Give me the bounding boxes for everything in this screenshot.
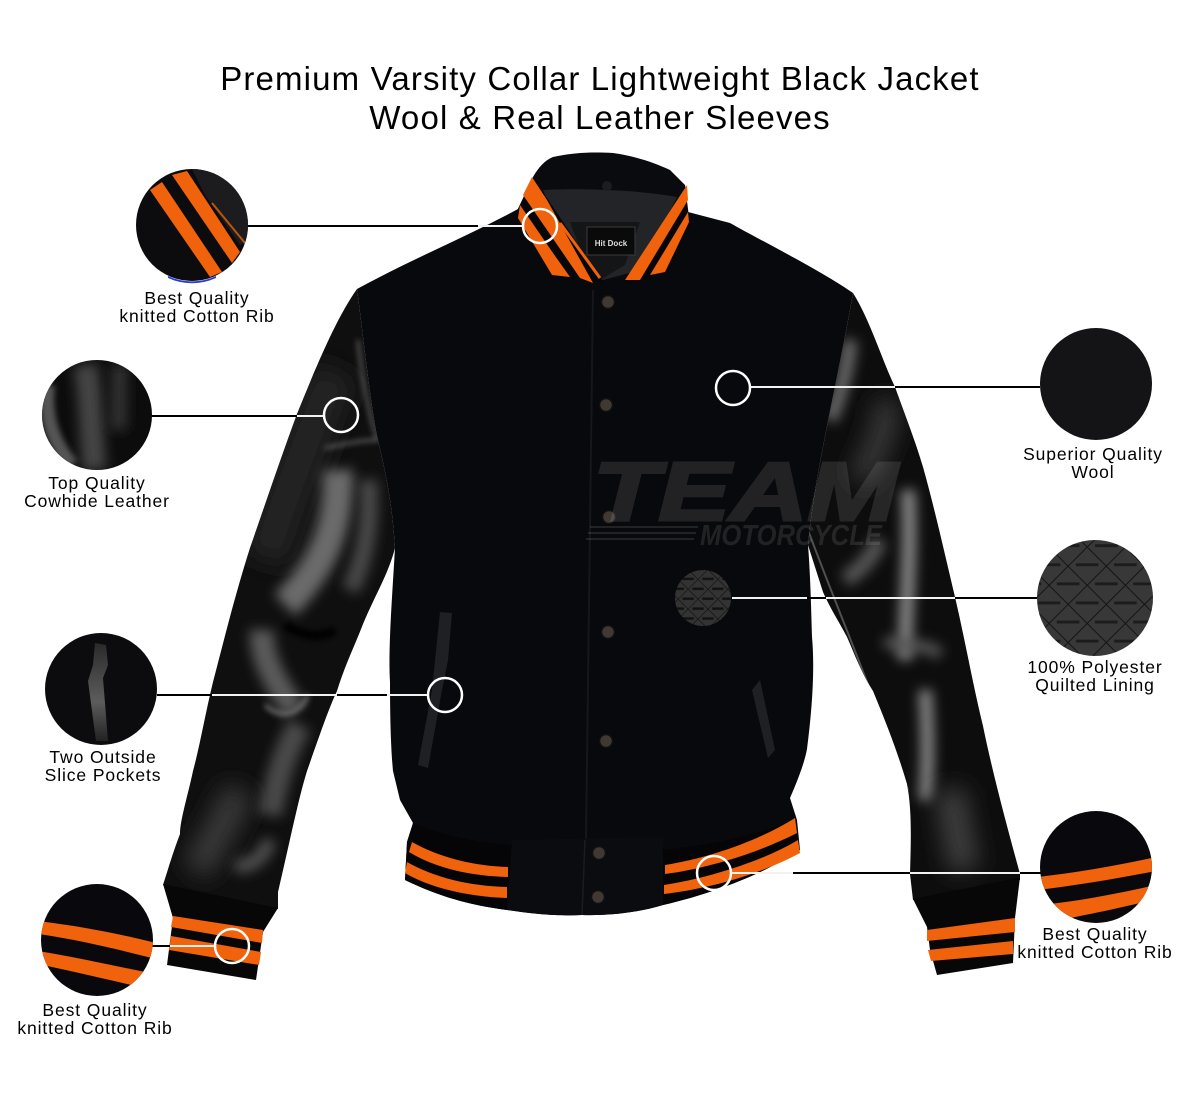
- watermark: TEAM: [593, 445, 899, 538]
- right leather sleeve: [808, 293, 1020, 900]
- quilted lining patch: [675, 570, 731, 626]
- placket seams and snaps: [586, 290, 616, 840]
- title: Wool & Real Leather Sleeves: [369, 99, 831, 136]
- title: Premium Varsity Collar Lightweight Black Jacket: [220, 60, 980, 97]
- collar back: [533, 152, 688, 278]
- callout: hem rib: [1017, 811, 1173, 962]
- callout: hem rib: knitted Cotton Rib: [1017, 942, 1173, 962]
- title: [220, 60, 980, 136]
- collar knit bands: [515, 177, 690, 284]
- slice pockets: [418, 612, 775, 768]
- callout: wool: [1023, 328, 1163, 482]
- callout: cuff rib: Best Quality: [42, 1000, 148, 1020]
- callout: hem rib: Best Quality: [1042, 924, 1148, 944]
- callout: wool: Wool: [1071, 462, 1115, 482]
- callout: quilted lining: 100% Polyester: [1027, 657, 1163, 677]
- callout: cuff rib: knitted Cotton Rib: [17, 1018, 173, 1038]
- jacket: [163, 152, 1020, 980]
- callout: cotton rib collar: [119, 165, 275, 326]
- callout: cuff rib: [17, 884, 173, 1038]
- right cuff: [913, 877, 1020, 975]
- hem rib: [405, 818, 800, 915]
- watermark: MOTORCYCLE: [700, 520, 883, 552]
- callout: wool: Superior Quality: [1023, 444, 1163, 464]
- callout: cowhide leather: [24, 360, 170, 511]
- callout: cotton rib collar: knitted Cotton Rib: [119, 306, 275, 326]
- callout: cowhide leather: Cowhide Leather: [24, 491, 170, 511]
- callout: cowhide leather: Top Quality: [48, 473, 146, 493]
- jacket wool body: [357, 200, 853, 915]
- callout: slice pockets: Slice Pockets: [45, 765, 161, 785]
- callout: slice pockets: Two Outside: [49, 747, 157, 767]
- callout rings: [215, 209, 750, 963]
- callout: slice pockets: [45, 633, 161, 785]
- collar lining with label: [543, 181, 677, 280]
- callout lines: [150, 226, 1042, 946]
- callout: quilted lining: [1027, 538, 1163, 695]
- left cuff: [163, 884, 278, 980]
- callout: quilted lining: Quilted Lining: [1035, 675, 1155, 695]
- watermark: [586, 445, 899, 552]
- left leather sleeve: [163, 289, 395, 909]
- callout: cotton rib collar: Best Quality: [144, 288, 250, 308]
- collar lining with label: Hit Dock: [595, 239, 628, 248]
